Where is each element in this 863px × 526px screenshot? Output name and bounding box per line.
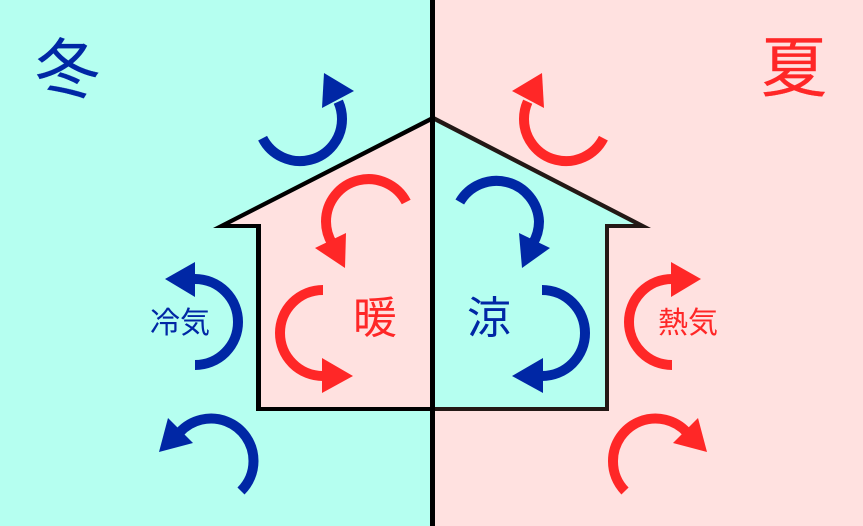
- label: cool: 涼: [467, 294, 511, 343]
- arrow: winter outside bottom: [159, 418, 254, 491]
- arrow: cold air outside: [165, 262, 238, 365]
- arrow: hot air outside: [629, 262, 701, 365]
- arrow: summer outside bottom: [613, 418, 707, 491]
- panel: winter background: [0, 0, 432, 526]
- label: cold air: 冷気: [150, 307, 210, 340]
- center divider line: [430, 0, 435, 526]
- arrow: summer inside lower: [512, 290, 585, 393]
- house: summer half: [433, 116, 651, 411]
- arrow: winter outside top: [263, 73, 354, 161]
- house: winter half: [213, 116, 433, 411]
- arrow: summer outside top: [512, 73, 603, 161]
- label: warm: 暖: [353, 294, 397, 343]
- panel: summer background: [432, 0, 863, 526]
- arrow: summer inside top: [460, 181, 550, 268]
- arrow: winter inside top: [315, 179, 406, 268]
- heading: summer: 夏: [761, 31, 827, 105]
- arrow: winter inside lower: [280, 290, 353, 393]
- heading: winter: 冬: [35, 33, 100, 106]
- label: hot air: 熱気: [658, 307, 718, 340]
